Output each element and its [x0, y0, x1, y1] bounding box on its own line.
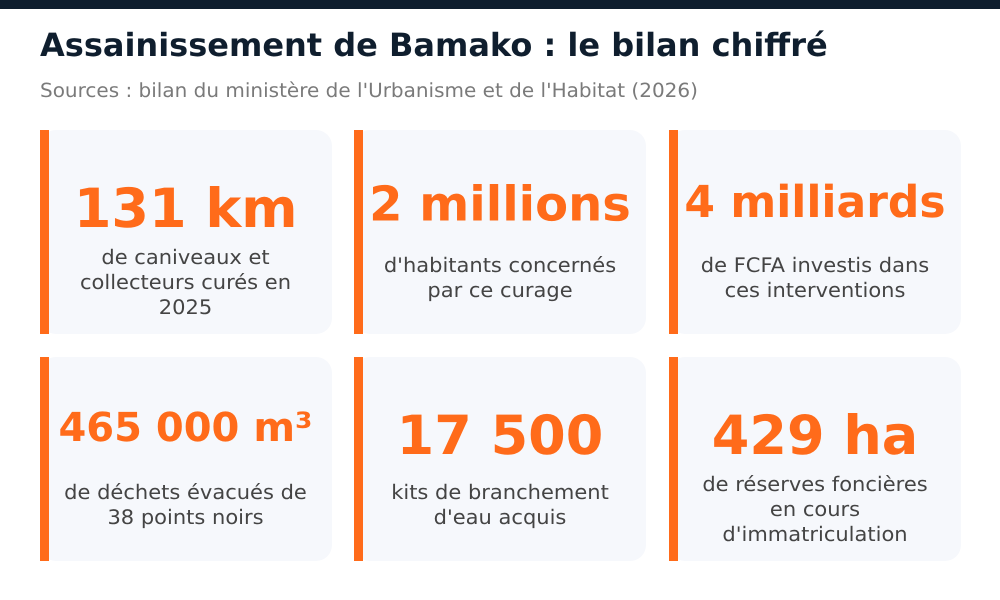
label: habitants: d'habitants concernés	[384, 253, 616, 277]
label: déchets: de déchets évacués de	[64, 480, 307, 504]
panel: 2 millions	[354, 130, 646, 334]
label: réserves: d'immatriculation	[722, 522, 908, 546]
panel: 465 000 m3	[40, 357, 332, 561]
label: déchets: 38 points noirs	[107, 505, 264, 529]
value: 465 000 m3: 465 000 m³	[58, 405, 313, 451]
value: 4 milliards: 4 milliards	[684, 177, 946, 228]
panel: 4 milliards	[669, 130, 961, 334]
label: caniveaux: de caniveaux et	[101, 245, 270, 269]
subtitle: Sources : bilan du ministère de l'Urbanisme et de l'Habitat (2026)	[40, 79, 698, 102]
label: FCFA: ces interventions	[725, 278, 905, 302]
panel: 17 500	[354, 357, 646, 561]
value: 429 ha: 429 ha	[712, 404, 918, 467]
label: kits: kits de branchement	[391, 480, 609, 504]
label: réserves: de réserves foncières	[702, 472, 928, 496]
label: FCFA: de FCFA investis dans	[701, 253, 929, 277]
value: 131 km: 131 km	[74, 177, 298, 240]
label: habitants: par ce curage	[427, 278, 573, 302]
value: 2 millions: 2 millions	[369, 176, 631, 232]
value: 17 500: 17 500	[397, 404, 603, 467]
label: kits: d'eau acquis	[434, 505, 566, 529]
label: réserves: en cours	[770, 497, 860, 521]
panel: 429 ha	[669, 357, 961, 561]
label: caniveaux: 2025	[159, 295, 212, 319]
title: Assainissement de Bamako : le bilan chiffré	[40, 26, 828, 64]
label: caniveaux: collecteurs curés en	[80, 270, 291, 294]
panel: 131 km	[40, 130, 332, 334]
top band	[0, 0, 1000, 9]
